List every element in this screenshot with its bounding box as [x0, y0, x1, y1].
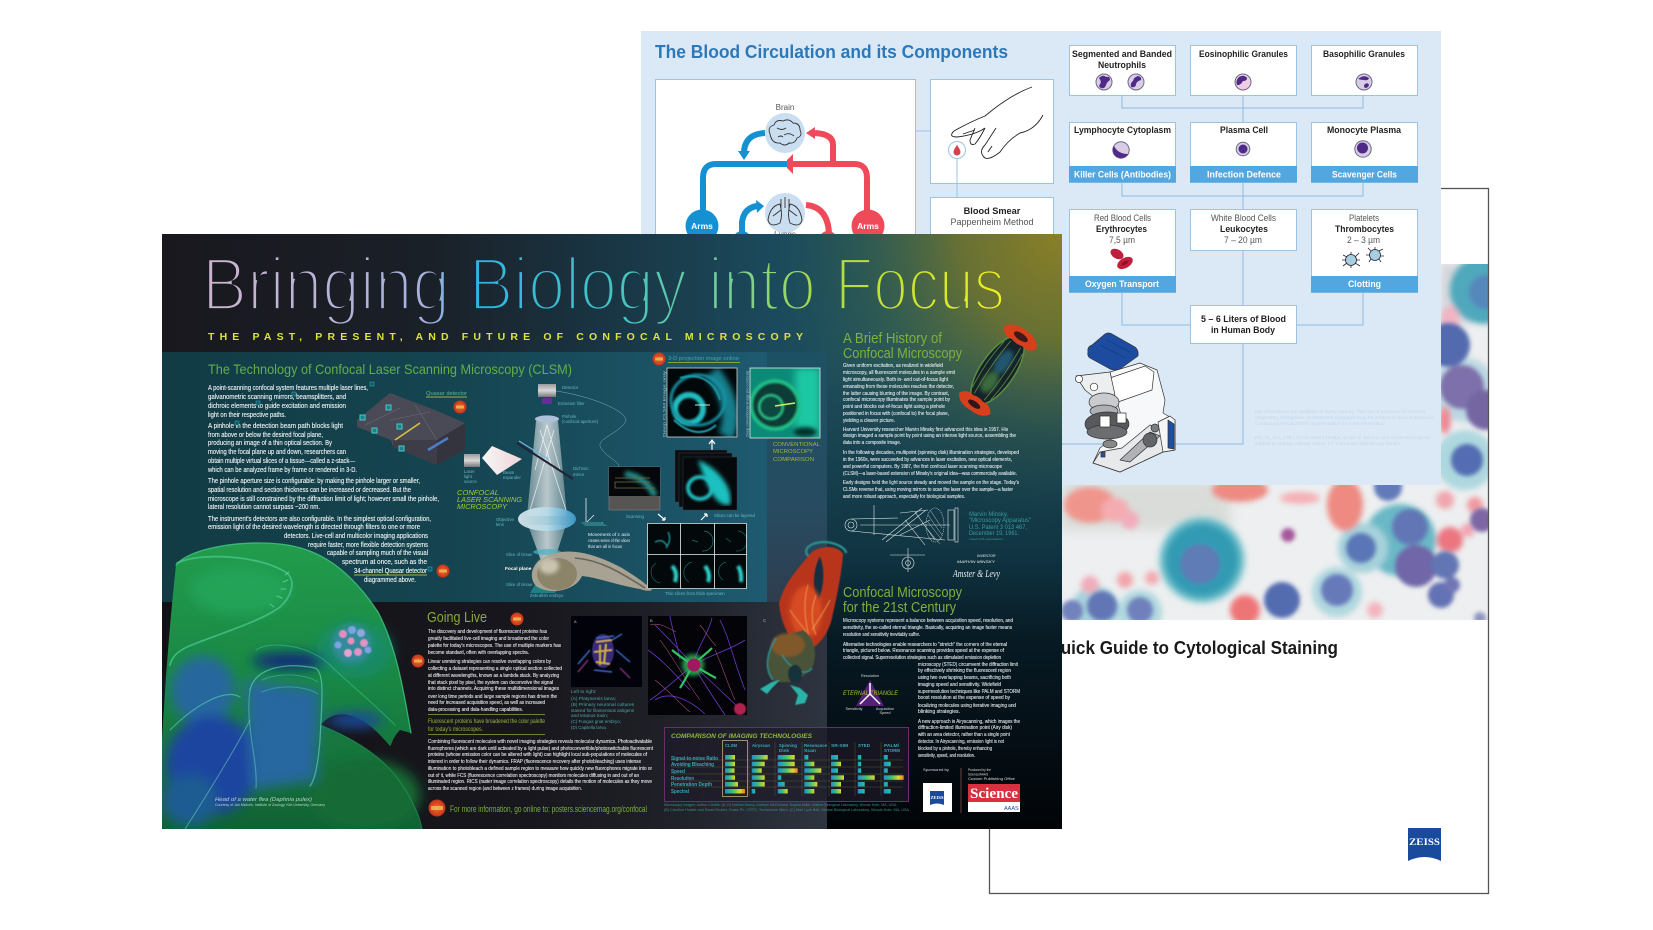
circulation diagram: Arms: [857, 221, 879, 231]
CLSM body text: A pinhole in the detection beam path blocks light: [208, 423, 343, 430]
comparison of imaging technologies table: STORM: [884, 748, 900, 754]
CLSM projection image: [667, 368, 737, 437]
icon: web badge detector: [436, 564, 450, 578]
conventional microscopy comparison label: COMPARISON: [773, 457, 814, 463]
water flea caption: Courtesy of Jan Michels, Institute of Zoology, Kiel University, Germany: [215, 803, 325, 807]
right column heading: 21st century: for the 21st Century: [843, 599, 956, 616]
total blood volume card: 5 – 6 Liters of Blood: [1201, 314, 1286, 324]
optical diagram labels: Emission filter: [558, 401, 585, 406]
CLSM body text: A point-scanning confocal system features multiple laser lines,: [208, 385, 368, 392]
arrow: stack to projection: [709, 440, 715, 450]
Going Live body text: over long time periods and large sample regions has driven the: [428, 694, 557, 700]
conventional microscopy image: [750, 368, 820, 438]
Going Live body text: data-processing and data-handling capabilities.: [428, 707, 523, 713]
patent drawing: [845, 505, 958, 572]
icon: brain: [769, 120, 801, 145]
cell card: eosinophilic granules: Eosinophilic Granules: [1199, 49, 1288, 59]
image B: neuron culture: [648, 616, 747, 715]
history body text: Given uniform excitation, as realized in widefield: [843, 363, 943, 369]
cell card: white blood cells: White Blood Cells: [1211, 213, 1276, 223]
21st century body text: superresolution techniques like PALM and STORM: [918, 689, 1020, 695]
cell card: lymphocyte cytoplasm: Killer Cells (Antibodies): [1074, 170, 1171, 180]
Going Live body text: greatly facilitated live-cell imaging and broadened the color: [428, 636, 549, 642]
cell card: platelets: [1311, 210, 1418, 292]
legal small print: Contact your local ZEISS representative for more information.: [1255, 421, 1386, 427]
blood panel heading: The Blood Circulation and its Components: [655, 41, 1008, 62]
image A: larva: A: [574, 619, 577, 624]
CLSM body text: light on their respective paths.: [208, 412, 286, 419]
icon: ZEISS logo: [1408, 828, 1441, 861]
optical diagram labels: Slice of tissue: [506, 582, 533, 587]
CLSM section heading: The Technology of Confocal Laser Scanning Microscopy (CLSM): [208, 361, 572, 377]
Going Live body text: collecting a dataset representing a single optical section collected: [428, 666, 562, 672]
poster title: [209, 257, 1002, 324]
water flea caption: Head of a water flea (Daphnia pulex): [215, 797, 312, 803]
cell card: white blood cells: [1190, 210, 1296, 250]
cell card: monocyte plasma: [1311, 122, 1418, 182]
Going Live body text: illuminated region. RICS (raster image correlation spectroscopy) details the motion of molecules as they move: [428, 779, 652, 785]
sponsors: Custom Publishing Office: [968, 776, 1016, 781]
21st century body text: microscopy (STED) circumvent the diffraction limit: [918, 662, 1018, 668]
Going Live body text: illumination to photobleach a defined sample region to measure how quickly new fluorophores migrate into or: [428, 766, 652, 772]
icon: web badge unmixing: [412, 654, 424, 668]
icon: blood drop: [948, 142, 966, 158]
cell card: segmented and banded neutrophils: Segmented and Banded: [1072, 49, 1172, 59]
optical diagram labels: Scanning: [626, 514, 645, 519]
21st century body text: Alternative technologies enable researchers to "stretch" the corners of the eternal: [843, 642, 1007, 648]
history body text: Early designs held the light source steady and moved the sample on the stage. Today's: [843, 480, 1019, 486]
CLSM body text: capable of sampling much of the visual: [327, 550, 428, 557]
3-D projection image label: 3-D projection image online: [668, 356, 739, 362]
cell card: red blood cells: Oxygen Transport: [1085, 279, 1159, 289]
cell card: red blood cells: Red Blood Cells: [1094, 213, 1151, 223]
history body text: In the following decades, multipoint (spinning disk) illumination strategies, developed: [843, 450, 1019, 456]
cell card: lymphocyte cytoplasm: Lymphocyte Cytoplasm: [1074, 125, 1171, 135]
image A B C D caption: and tetanus toxin;: [571, 713, 608, 719]
Going Live body text: The discovery and development of fluorescent proteins has: [428, 629, 547, 635]
patent citation: Marvin Minsky,: [969, 512, 1008, 518]
image A B C D caption: stained for filamentous antigens: [571, 708, 635, 714]
CLSM body text: The instrument's detectors are also configurable. In the simplest optical configuration,: [208, 516, 431, 523]
Science AAAS logo: [968, 784, 1020, 812]
Science AAAS logo: AAAS: [1004, 806, 1019, 812]
optical diagram labels: Slices can be layered: [714, 513, 755, 518]
CLSM body text: obtain multiple virtual slices of a tissue—called a z-stack—: [208, 458, 355, 465]
optical diagram labels: (confocal aperture): [562, 419, 599, 424]
page outline: [990, 188, 1488, 894]
comparison of imaging technologies table: Disk: [779, 748, 789, 754]
CLSM body text: galvanometric scanning mirrors, beamsplitters, and: [208, 394, 346, 401]
panel: cytological staining guide page: [990, 188, 1518, 894]
Going Live pull quote: for today's microscopes.: [428, 727, 483, 733]
comparison of imaging technologies table: Spinning: [779, 743, 797, 749]
Going Live heading: Going Live: [427, 609, 487, 626]
cell card: monocyte plasma: Scavenger Cells: [1332, 170, 1397, 180]
Going Live body text: palette for today's microscopes. The use of multiple markers has: [428, 643, 561, 649]
CLSM body text: lateral resolution cannot surpass ~200 nm.: [208, 504, 320, 511]
image A B C D caption: (A) Platynereis larva;: [571, 696, 616, 702]
history body text: microscopy, all fluorescent molecules in a sample emit: [843, 370, 955, 376]
conventional microscopy comparison label: CONVENTIONAL: [773, 442, 821, 448]
CLSM body text: emission light of the desired wavelength is directed through filters to one or more: [208, 524, 420, 531]
image D: capitella larva: [954, 319, 1042, 421]
cell card: platelets: 2 – 3 µm: [1347, 235, 1380, 245]
eternal triangle diagram: Resolution: [861, 674, 879, 678]
confocal laser scanning microscopy label: MICROSCOPY: [457, 502, 508, 511]
comparison of imaging technologies table: Resolution: [671, 776, 694, 782]
legal small print: subject to change without notice. | © Carl Zeiss Microscopy GmbH: [1255, 440, 1401, 447]
21st century body text: Microscopy systems represent a balance between acquisition speed, resolution, and: [843, 618, 1013, 624]
blood smear box: Blood Smear: [964, 206, 1021, 216]
history body text: in the 1960s, were succeeded by advances in laser excitation, new optical elements,: [843, 457, 1012, 463]
optical diagram labels: expander: [503, 475, 521, 480]
Going Live body text: fluorophores (which are dark until activated by a light pulse) and photoconvertible/photoswitchable fluorescent: [428, 746, 653, 752]
comparison of imaging technologies table: Resonance: [804, 743, 827, 749]
history body text: and more robust approach, especially for biological samples.: [843, 494, 965, 500]
21st century body text: sensitivity, speed, and resolution.: [918, 753, 975, 759]
poster subtitle: THE PAST, PRESENT, AND FUTURE OF CONFOCAL MICROSCOPY: [208, 331, 803, 343]
optical diagram labels: source: [464, 479, 478, 484]
Going Live body text: Linear unmixing strategies can resolve overlapping colors by: [428, 659, 551, 665]
comparison of imaging technologies table: Airyscan: [752, 743, 770, 749]
CLSM body text: which can be analyzed frame by frame or rendered in 3-D.: [207, 467, 357, 474]
image A B C D caption: [571, 689, 635, 731]
Going Live body text: become standard, often with overlapping spectra.: [428, 650, 529, 656]
cell card: red blood cells: Erythrocytes: [1096, 224, 1147, 234]
comparison of imaging technologies table: COMPARISON OF IMAGING TECHNOLOGIES: [671, 733, 813, 740]
history body text: light simultaneously. Both in- and out-of-focus light: [843, 377, 948, 383]
patent citation: [969, 512, 1031, 541]
history body text: confocal microscopy illuminates the sample point by: [843, 397, 950, 403]
cell card: segmented and banded neutrophils: Neutrophils: [1098, 60, 1146, 70]
eternal triangle diagram: Sensitivity: [845, 707, 863, 711]
patent signature: INVENTOR: [977, 554, 996, 558]
21st century body text: collected signal. Superresolution strategies such as stimulated emission depletion: [843, 655, 1001, 661]
Science AAAS logo: Science: [970, 786, 1018, 802]
21st century body text: blinking strategies.: [918, 709, 960, 715]
confocal laser scanning microscopy label: CONFOCAL: [457, 488, 499, 497]
21st century body text: by effectively shrinking the fluorescent region: [918, 668, 1011, 674]
icon: microscope: [1075, 333, 1175, 472]
legal small print: Not all products are available in every country. The use of products for medical: [1255, 409, 1425, 415]
image A B C D caption: (D) Capitella larva.: [571, 725, 607, 731]
microscopy image credits: (B) Caroline Hunter and David Drubin; Grass Ph. CRTD, Technische Hjem; (C) Mari Lyck Bak, Marine Biological Laboratory, Woods Hole, MA, USA: [664, 808, 910, 812]
Going Live body text: out of it, while FCS (fluorescence correlation spectroscopy) monitors molecules diffusing in and out of an: [428, 773, 639, 779]
CLSM body text: require faster, more flexible detection systems: [308, 542, 428, 549]
cell card: red blood cells: 7,5 µm: [1109, 235, 1135, 245]
Going Live pull quote: Fluorescent proteins have broadened the color palette: [428, 719, 546, 725]
more information link: For more information, go online to: posters.sciencemag.org/confocal: [450, 804, 647, 814]
history body text: CLSMs reverse that, using moving mirrors to scan the laser over the sample—a faster: [843, 487, 1013, 493]
21st century body text: boost resolution at the expense of speed by: [918, 695, 1010, 701]
eternal triangle diagram: [843, 674, 899, 715]
CLSM body text: spatial resolution and section thickness can be increased or decreased. But the: [208, 487, 411, 494]
Going Live body text: across the scanned region (and between z frames) during image acquisition.: [428, 786, 582, 792]
stained cells photograph: [1062, 264, 1488, 620]
CLSM body text: spectrum at once, such as the: [342, 559, 427, 566]
sponsors: Sponsored by: [923, 767, 949, 772]
optical diagram labels: Slice of tissue: [506, 552, 533, 557]
z-axis note: [588, 532, 630, 548]
21st century body text: imaging speed and sensitivity. Widefield: [918, 682, 1001, 688]
arrow: slices to stack: [701, 514, 707, 520]
image A B C D caption: Left to right:: [571, 689, 596, 695]
history body text: data into a composite image.: [843, 440, 901, 446]
illustration: water flea head: [162, 543, 422, 830]
CLSM body text: dichroic elements to guide excitation and emission: [208, 403, 346, 410]
history body text: [843, 363, 1019, 500]
connector lines: [1062, 95, 1363, 444]
right column heading: 21st century: Confocal Microscopy: [843, 584, 962, 601]
sponsors: Produced by the: [968, 767, 992, 772]
Going Live body text: that stack pixel by pixel, the system can deconvolve the signal: [428, 680, 553, 686]
image A B C D caption: (C) Fungus gnat embryo;: [571, 719, 621, 725]
cell card: lymphocyte cytoplasm: [1069, 122, 1176, 182]
cell card: platelets: Thrombocytes: [1335, 224, 1394, 234]
cell card: plasma cell: Infection Defence: [1207, 170, 1281, 180]
grid of thin optical slices: [647, 523, 747, 589]
Going Live body text: interest in order to follow their dynamics. FRAP (fluorescence recovery after photobleaching) uses intense: [428, 759, 641, 765]
image C: fungus gnat embryo: [760, 542, 846, 705]
Going Live body text: [428, 629, 653, 792]
history body text: and powerful computers. By 1987, the first confocal laser scanning microscope: [843, 464, 1002, 470]
more information link: [428, 800, 647, 816]
sponsors: Science/AAAS: [968, 772, 988, 776]
history body text: yielding a clearer picture.: [843, 418, 895, 424]
21st century body text: localizing molecules using iterative imaging and: [918, 703, 1016, 709]
ZEISS sponsor logo: ZEISS: [930, 795, 944, 800]
CLSM body text: 34-channel Quasar detector: [354, 568, 428, 575]
arrow: scanning to slices: [658, 514, 665, 520]
cell card: segmented and banded neutrophils: [1070, 46, 1176, 96]
patent signature: MARVIN MINSKY: [957, 560, 996, 564]
icon: erythrocytes: [1109, 247, 1135, 272]
optical diagram labels: light: [464, 474, 473, 479]
optical diagram labels: Pinhole: [562, 414, 577, 419]
panel: blood circulation and its components: [641, 31, 1441, 485]
CLSM body text: microscope is still constrained by the diffraction limit of light; however small the pinhole,: [208, 496, 439, 503]
icon: thrombocytes: [1342, 247, 1384, 268]
CLSM body text: [207, 382, 439, 584]
optical diagram labels: Thin slices from thick specimen: [665, 591, 725, 596]
finger prick box: [930, 80, 1054, 197]
history body text: Harvard University researcher Marvin Minsky first advanced this idea in 1957. His: [843, 427, 1008, 433]
history body text: emanating from these molecules reaches the detector,: [843, 384, 954, 390]
patent signature: [952, 554, 1000, 580]
Going Live body text: proteins (whose emission color can be altered with light) can highlight local sub-populations of molecules of: [428, 752, 647, 758]
cell card: white blood cells: 7 – 20 µm: [1224, 235, 1262, 245]
CLSM body text: The pinhole aperture size is configurable: by making the pinhole larger or smaller,: [208, 478, 420, 485]
circulation diagram: Brain: [776, 103, 794, 112]
21st century body text: A new approach is Airyscanning, which images the: [918, 719, 1020, 725]
patent signature: Amster & Levy: [952, 569, 1000, 580]
21st century body text: resolution and sensitivity inevitably suffer.: [843, 632, 920, 638]
water flea caption: [215, 797, 325, 807]
sponsors: [923, 767, 1020, 813]
comparison of imaging technologies table: Speed: [671, 769, 685, 775]
21st century body text: diffraction-limited illumination point (Airy disk): [918, 725, 1012, 731]
confocal optical path diagram: [464, 384, 755, 598]
cell card: monocyte plasma: Monocyte Plasma: [1327, 125, 1402, 135]
21st century body text: with an area detector, rather than a single point: [917, 732, 1010, 738]
optical diagram labels: Laser: [464, 469, 475, 474]
patent citation: U.S. Patent 3 013 467,: [969, 525, 1027, 531]
optical diagram labels: Objective: [496, 517, 515, 522]
total blood volume card: [1190, 306, 1296, 344]
confocal laser scanning microscopy label: LASER SCANNING: [457, 495, 522, 504]
eternal triangle diagram: Acquisition: [876, 707, 894, 711]
Going Live pull quote: [428, 714, 546, 734]
z-axis note: creates series of thin slices: [588, 538, 631, 543]
icon: Quasar detector module: [357, 393, 465, 465]
CLSM body text: moving the focal plane up and down, researchers can: [208, 449, 346, 456]
21st century body text: using two overlapping beams, sacrificing both: [918, 675, 1011, 681]
cell card: platelets: Platelets: [1349, 213, 1379, 223]
circulation diagram: Lungs: [774, 230, 796, 239]
right column heading: 21st century: [843, 584, 962, 616]
icon: lungs: [768, 197, 802, 225]
z-axis note: Movement of z axis: [588, 532, 631, 537]
history body text: the latter causing blurring of the image. By contrast,: [843, 391, 949, 397]
history body text: positioned in focus with (confocal to) the focal plane,: [843, 411, 949, 417]
stacked image slices: [675, 450, 737, 510]
CLSM body text: detectors. Live-cell and multicolor imaging applications: [284, 533, 428, 540]
cell card: platelets: Clotting: [1348, 279, 1381, 289]
conventional microscopy comparison label: MICROSCOPY: [773, 449, 813, 455]
Going Live body text: into distinct channels. Acquiring these multidimensional images: [428, 686, 559, 692]
optical diagram labels: Beam: [503, 470, 515, 475]
image A: larva: [571, 616, 642, 687]
cell card: plasma cell: [1190, 122, 1297, 182]
patent citation: Used with permission: [969, 537, 1003, 541]
total blood volume card: in Human Body: [1211, 325, 1276, 335]
optical diagram labels: lens: [496, 522, 504, 527]
circulation diagram: [656, 80, 930, 290]
icon: web badge Quasar: [454, 400, 466, 414]
history body text: design imaged a sample point by point using an intense light source, assembling the: [843, 433, 1016, 439]
patent citation: "Microscopy Apparatus": [969, 518, 1031, 524]
z-axis note: that are all in focus: [588, 544, 623, 549]
patent citation: December 19, 1961.: [969, 531, 1019, 537]
image A B C D caption: (B) Primary neuronal cultures: [571, 702, 635, 708]
confocal optical path diagram: Focal plane: [505, 566, 532, 572]
right column heading: history: Confocal Microscopy: [843, 345, 962, 362]
history body text: point and blocks out-of-focus light using a pinhole: [843, 404, 945, 410]
comparison of imaging technologies table: Penetration Depth: [671, 782, 712, 788]
comparison of imaging technologies table: CLSM: [725, 743, 737, 749]
cell card: basophilic granules: [1312, 46, 1418, 96]
comparison of imaging technologies table: Avoiding Bleaching: [671, 762, 714, 768]
legal small print: diagnostic, therapeutic or treatment purposes may be subject to local restrictions.: [1255, 415, 1435, 421]
CLSM body text: producing an image of a thin optical section. By: [208, 440, 332, 447]
circulation diagram: Arms: [691, 221, 713, 231]
comparison of imaging technologies table: SR-SIM: [831, 743, 848, 749]
comparison of imaging technologies table: Signal-to-noise Ratio: [671, 756, 718, 762]
history body text: (CLSM)—a laser-based extension of Minsky's original idea—was commercially available.: [843, 471, 1017, 477]
Quasar detector label: Quasar detector: [426, 391, 467, 397]
comparison of imaging technologies table: Scan: [804, 748, 816, 754]
water flea compound eye: [332, 624, 372, 664]
CLSM body text: diagrammed above.: [364, 577, 416, 584]
blood smear box: [930, 198, 1054, 288]
right column heading: history: A Brief History of: [843, 330, 943, 347]
comparison of imaging technologies table: [664, 728, 908, 802]
eternal triangle diagram: Speed: [880, 711, 890, 715]
scanning sample image: [609, 467, 660, 510]
optical diagram labels: Zebrafish embryo: [530, 593, 564, 598]
21st century body text: sensitivity, the so-called eternal triangle. Basically, acquiring an image faster means: [843, 625, 1012, 631]
optical diagram labels: mirror: [573, 472, 585, 477]
icon: web badge going live: [510, 612, 524, 626]
confocal laser scanning microscopy label: [457, 490, 522, 509]
cell card: basophilic granules: Basophilic Granules: [1323, 49, 1405, 59]
comparison of imaging technologies table: Spectral: [671, 789, 689, 795]
optical diagram labels: Detector: [562, 385, 579, 390]
image B: neuron culture: B: [650, 618, 653, 623]
conventional microscopy comparison label: [773, 442, 820, 461]
comparison of imaging technologies table: PALM/: [884, 743, 900, 749]
cell card: plasma cell: Plasma Cell: [1220, 125, 1268, 135]
guide title: A Quick Guide to Cytological Staining: [1031, 638, 1338, 658]
microscopy image credits: [664, 803, 910, 812]
vertical image captions: [662, 371, 750, 437]
vertical image captions: Deep CLSM image only: [662, 371, 666, 437]
legal small print: [1255, 409, 1435, 447]
Going Live body text: Combining fluorescent molecules with novel imaging strategies reveals molecular dynamics. Photoactivatable: [428, 739, 652, 745]
legal small print: EN_41_013_136 | CZ 05-2018 | Design, scope of delivery and technical progress: [1255, 435, 1431, 441]
eternal triangle diagram: ETERNAL TRIANGLE: [843, 690, 899, 697]
21st century body text: [843, 618, 1020, 759]
image C: fungus gnat embryo: C: [763, 618, 767, 623]
microscopy image credits: Microscopy images: Author Credits: (A, D) Nathan Kenny, Kathryn McClelland, Sophia Miller, Marine Biological Laboratory, Woods Hole, MA, USA;: [664, 803, 897, 807]
cell card: eosinophilic granules: [1190, 46, 1296, 96]
Going Live body text: at different wavelengths, known as a lambda stack. By analyzing: [428, 673, 559, 679]
21st century body text: detector. In Airyscanning, emission light is not: [918, 739, 1004, 745]
comparison bars: [725, 755, 904, 794]
comparison of imaging technologies table: STED: [858, 743, 870, 749]
icon: web badge 3-D: [652, 352, 666, 366]
blood smear box: Pappenheim Method: [950, 217, 1034, 227]
optical diagram labels: [464, 385, 755, 598]
icon: ZEISS logo: ZEISS: [1409, 837, 1440, 847]
21st century body text: blocked by a pinhole, thereby enhancing: [918, 746, 992, 752]
optical diagram labels: Dichroic: [573, 466, 589, 471]
panel: Bringing Biology into Focus poster: [162, 234, 1062, 830]
21st century body text: triangle, pictured below. Resonance scanning provides speed at the expense of: [843, 648, 1004, 654]
Going Live body text: need for increased acquisition speed, as well as increased: [428, 700, 545, 706]
vertical image captions: Deep conventional image (no confocal): [746, 371, 750, 437]
right column heading: history: [843, 330, 962, 362]
cell card: white blood cells: Leukocytes: [1220, 224, 1268, 234]
cell card: red blood cells: [1069, 210, 1176, 292]
xyz axis: [581, 498, 608, 526]
CLSM body text: from above or below the desired focal plane,: [208, 432, 323, 439]
